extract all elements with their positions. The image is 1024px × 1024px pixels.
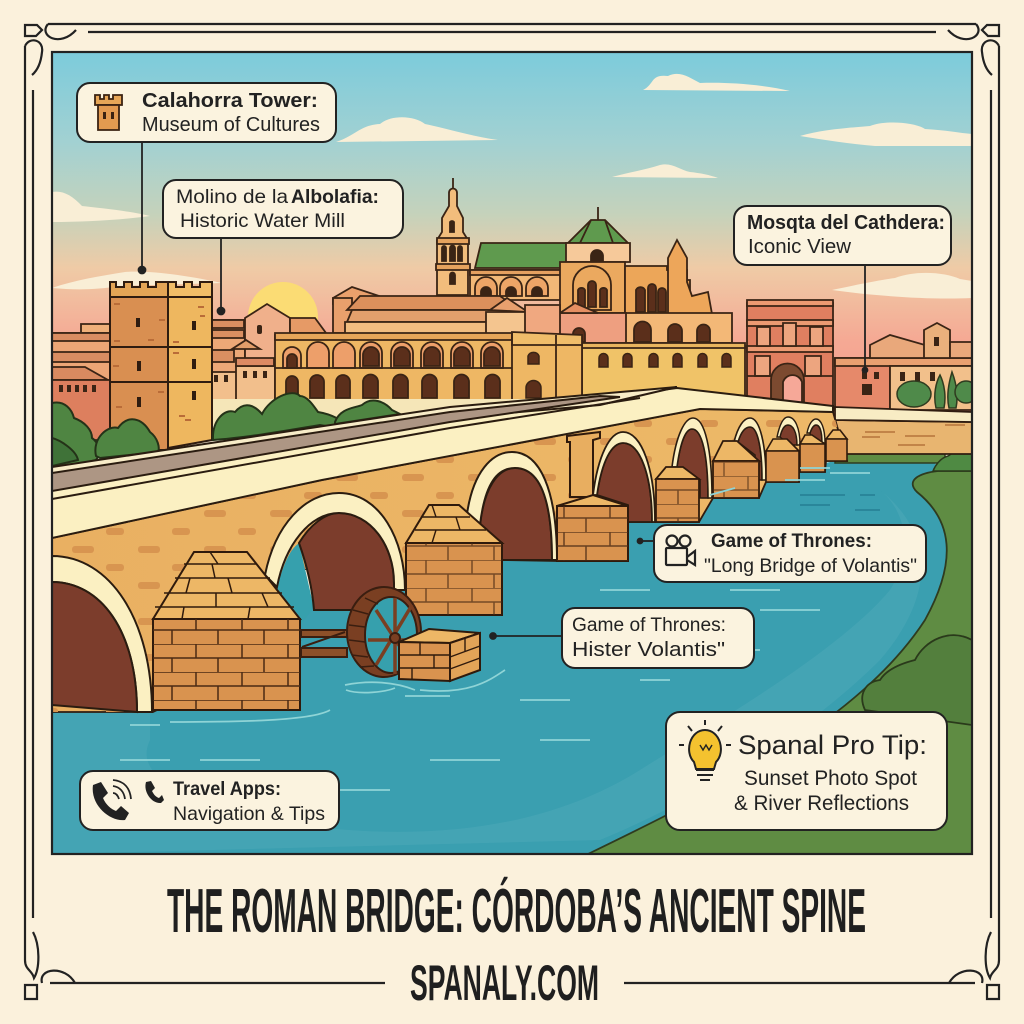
Calahorra tower (110, 282, 212, 450)
label text: "Long Bridge of Volantis" (704, 555, 917, 577)
connector: Albolafia (218, 238, 224, 314)
label text: Museum of Cultures (142, 114, 320, 136)
callout: Travel Apps (80, 771, 339, 830)
cypress trees and shrub (897, 372, 977, 408)
callout: Mosque (734, 206, 951, 265)
arcade arches (275, 333, 512, 400)
pier 3 with column (557, 432, 628, 561)
far bank strip (213, 399, 529, 425)
dome (597, 207, 599, 220)
icon: phone small (145, 781, 164, 803)
arch 4 (597, 443, 652, 522)
bushes (862, 635, 972, 725)
connector: Game of Thrones lower (490, 633, 562, 639)
connector: Calahorra (138, 142, 146, 274)
label text: Calahorra Tower: (142, 89, 318, 112)
label text: Spanal Pro Tip: (738, 730, 927, 760)
river water (52, 462, 949, 854)
water wheel (301, 587, 421, 677)
label text: Iconic View (748, 236, 852, 258)
piers 6 to 8 (766, 430, 847, 482)
clouds (52, 74, 972, 299)
picture border (52, 52, 972, 854)
trees (52, 393, 400, 470)
callout: Calahorra Tower (77, 83, 336, 142)
icon: light bulb (679, 720, 731, 780)
arch 1 (52, 556, 152, 712)
arch 3 (480, 468, 552, 560)
mill block (399, 629, 480, 681)
Roman bridge (52, 387, 847, 712)
label text: Travel Apps: (173, 779, 281, 800)
website: SPANALY.COM (410, 955, 599, 1011)
arch 6 (738, 427, 762, 480)
yellow long wall (582, 345, 746, 395)
red gate (747, 300, 833, 412)
illustrated scene (52, 52, 977, 854)
road deck (52, 387, 833, 538)
green strip below far wall (834, 454, 946, 464)
callout: Spanal Pro Tip (666, 712, 947, 830)
label text: Hister Volantis" (572, 639, 725, 661)
sun (248, 282, 318, 320)
icon: phone large (93, 780, 131, 820)
connector: Mosque (862, 265, 868, 372)
arch 7 and 8 (780, 425, 822, 445)
icon: film camera (666, 536, 695, 565)
sky (52, 52, 972, 412)
icon: tower (95, 95, 122, 130)
cathedral lower roofs (333, 287, 379, 304)
pier 4 (656, 467, 699, 522)
river bank (588, 471, 972, 854)
right bank wall (835, 407, 972, 454)
label text: & River Reflections (734, 792, 909, 815)
label text: Mosqta del Cathdera: (747, 212, 945, 234)
water ripples (120, 468, 880, 790)
arch 5 (677, 429, 708, 498)
pier 1 (153, 552, 300, 710)
label text: Sunset Photo Spot (744, 767, 917, 790)
green nave roof (475, 243, 568, 268)
pier 5 (713, 441, 759, 498)
mosque-cathedral (275, 178, 745, 402)
bell tower (436, 178, 470, 295)
label text: Game of Thrones: (572, 615, 726, 636)
label text: Game of Thrones: (711, 531, 872, 552)
bridge masonry (52, 409, 847, 712)
arcade (275, 335, 582, 402)
pier 2 (406, 505, 502, 615)
arch 2 (276, 544, 312, 606)
callout: Molino de la Albolafia (163, 180, 403, 238)
label text: Historic Water Mill (180, 210, 345, 232)
callout: Game of Thrones upper (654, 525, 926, 582)
right buildings (835, 323, 972, 410)
left buildings (52, 304, 326, 440)
connector: Game of Thrones upper (638, 538, 654, 544)
label text: Navigation & Tips (173, 803, 325, 825)
callout: Game of Thrones lower (562, 608, 754, 668)
label text: Molino de la (176, 186, 288, 208)
label text: Albolafia: (291, 186, 379, 208)
